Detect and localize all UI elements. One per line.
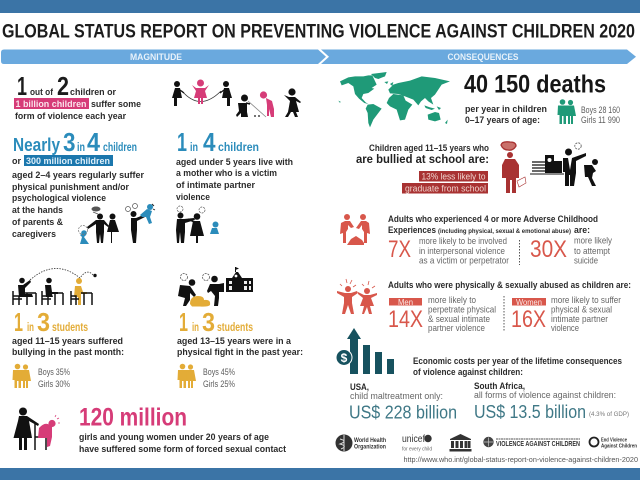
panel: nearly 3 in 4 children: 4 <box>87 127 100 157</box>
icon: economic cost chart <box>336 328 394 374</box>
panel: 1 in 3 students fighting: students <box>217 322 253 334</box>
panel: 1 out of 2 children: children or <box>70 87 116 98</box>
panel: 40 150 deaths: Girls 11 990 <box>581 115 620 125</box>
panel: economic costs: US$ 228 billion <box>349 402 457 422</box>
panel: 1 in 3 students fighting: Boys 45% <box>203 367 235 377</box>
icon: adults in violent scene <box>340 214 370 245</box>
panel: nearly 3 in 4 children <box>12 127 144 240</box>
panel: 120 million: have suffered some form of forced sexual contact <box>79 444 287 455</box>
icon: economic cost chart: $ <box>341 351 348 365</box>
panel: 120 million: girls and young women under 20 years of age <box>79 432 269 443</box>
panel: 40 150 deaths: 40 150 deaths <box>464 70 606 98</box>
icon: world map <box>338 72 450 127</box>
panel: 1 in 3 students bullying: 1 <box>14 307 23 337</box>
panel: 40 150 deaths: per year in children <box>465 104 547 115</box>
panel: 1 out of 2 children: out of <box>30 87 54 98</box>
panel: 1 out of 2 children: suffer some <box>91 99 141 110</box>
panel: 1 in 4 children: 4 <box>203 127 216 157</box>
logo: End Violence Against Children: End Violence <box>601 438 627 444</box>
icon: boy and girl (fighting) <box>178 364 196 388</box>
panel: physically and sexually abused: more likely to suffer <box>551 295 621 306</box>
panel: bullied at school: Children aged 11–15 years who <box>369 143 489 154</box>
logo: UNICEF: for every child <box>402 446 432 452</box>
panel: physically and sexually abused: perpetrate physical <box>428 304 496 316</box>
panel: economic costs <box>349 356 629 422</box>
panel: 120 million: 120 million <box>79 404 187 432</box>
panel: adverse childhood experiences: 7X <box>388 236 411 263</box>
panel: 1 in 3 students fighting: 3 <box>202 307 215 337</box>
panel: physically and sexually abused: 16X <box>511 306 546 333</box>
panel: adverse childhood experiences: in interpersonal violence <box>419 246 505 257</box>
panel: 40 150 deaths: Boys 28 160 <box>581 105 620 115</box>
panel: nearly 3 in 4 children: 3 <box>63 127 76 157</box>
panel: 1 in 3 students fighting: aged 13–15 years were in a <box>177 336 292 347</box>
panel: 1 in 4 children: of intimate partner <box>176 180 255 191</box>
panel: 1 in 3 students fighting: physical fight in the past year: <box>177 347 303 358</box>
panel: bullied at school: are bullied at school are: <box>356 152 489 166</box>
panel: physically and sexually abused: physical & sexual <box>551 304 612 316</box>
icon: parents punishing children <box>78 204 155 244</box>
panel: 1 in 4 children: in <box>190 142 198 154</box>
panel: economic costs: US$ 13.5 billion <box>474 402 586 422</box>
panel: adverse childhood experiences: are: <box>574 225 590 236</box>
section header: consequences <box>321 50 636 64</box>
panel: 1 in 3 students bullying: students <box>52 322 88 334</box>
icon: boy and girl (bullying) <box>12 364 31 388</box>
panel: economic costs: South Africa, <box>474 381 525 392</box>
panel: 1 in 3 students fighting: Girls 25% <box>203 379 235 389</box>
logo: World Health Organization <box>336 434 386 452</box>
panel: 1 in 3 students bullying: in <box>27 322 34 334</box>
panel: 1 in 3 students bullying: Girls 30% <box>38 379 70 389</box>
section header: consequences: CONSEQUENCES <box>448 52 518 62</box>
icon: distressed man and woman <box>337 279 377 314</box>
section header: magnitude: MAGNITUDE <box>130 52 182 62</box>
panel: 1 in 3 students bullying: aged 11–15 years suffered <box>12 336 123 347</box>
top banner <box>0 0 640 13</box>
logo: Office of the SRSG on Violence Against Children: VIOLENCE AGAINST CHILDREN <box>496 441 580 448</box>
panel: physically and sexually abused: Men <box>398 298 413 307</box>
panel: physically and sexually abused: & sexual intimate <box>428 314 490 325</box>
panel: adverse childhood experiences: suicide <box>574 256 598 266</box>
icon: bullied student with teacher and school <box>501 142 598 193</box>
panel: economic costs: (4.3% of GDP) <box>589 412 629 418</box>
panel: nearly 3 in 4 children: or <box>12 156 21 167</box>
logo: World Health Organization: Organization <box>354 444 386 450</box>
panel: 1 in 4 children: 1 <box>177 127 187 157</box>
panel: 1 out of 2 children: form of violence each year <box>15 111 126 122</box>
panel: adverse childhood experiences: more likely to be involved <box>419 236 507 247</box>
source url: http://www.who.int/global-status-report-on-violence-against-children-2020 <box>404 457 638 464</box>
panel: nearly 3 in 4 children: 300 million children <box>26 156 110 167</box>
logo: UNICEF: unicef <box>402 434 425 445</box>
panel: physically and sexually abused: intimate partner <box>551 314 608 325</box>
panel: economic costs: USA, <box>350 382 369 393</box>
panel: adverse childhood experiences: 30X <box>530 236 567 263</box>
icon: classroom bullying <box>13 268 97 305</box>
logo: UNESCO temple <box>450 434 472 452</box>
panel: nearly 3 in 4 children: children <box>103 142 137 154</box>
logo: End Violence Against Children <box>590 438 638 450</box>
panel: 1 out of 2 children: 2 <box>57 71 69 101</box>
panel: 1 out of 2 children: 1 billion children <box>16 99 87 110</box>
panel: 1 out of 2 children <box>14 71 141 122</box>
panel: physically and sexually abused <box>388 280 631 334</box>
logo: UNICEF <box>402 434 432 452</box>
panel: 1 in 4 children: a mother who is a victim <box>176 168 277 179</box>
panel: bullied at school: graduate from school <box>405 184 486 194</box>
panel: economic costs: all forms of violence against children: <box>474 390 616 401</box>
panel: 40 150 deaths: 0–17 years of age: <box>465 115 540 126</box>
panel: physically and sexually abused: violence <box>551 323 579 334</box>
section header: magnitude <box>1 50 326 64</box>
panel: 1 out of 2 children: 1 <box>17 71 27 101</box>
bottom banner <box>0 468 640 480</box>
panel: physically and sexually abused: partner violence <box>428 323 485 334</box>
panel: nearly 3 in 4 children: in <box>77 142 85 154</box>
icon: couple in conflict with child watching <box>176 206 219 243</box>
panel: 1 in 3 students bullying: 3 <box>37 307 50 337</box>
logo: Office of the SRSG on Violence Against Children <box>483 437 580 448</box>
panel: 1 in 4 children <box>176 127 293 203</box>
panel: economic costs: child maltreatment only: <box>350 391 443 402</box>
panel: adverse childhood experiences <box>388 214 612 266</box>
panel: 1 in 3 students bullying: bullying in the past month: <box>12 347 124 358</box>
logo: World Health Organization: World Health <box>354 437 386 444</box>
panel: physically and sexually abused: more likely to <box>428 295 476 306</box>
panel: nearly 3 in 4 children: psychological violence <box>12 193 106 204</box>
panel: 1 in 4 children: violence <box>176 192 210 203</box>
panel: nearly 3 in 4 children: Nearly <box>13 135 60 155</box>
panel: nearly 3 in 4 children: physical punishment and/or <box>12 182 129 193</box>
icon: students fighting near school <box>178 267 253 307</box>
icon: woman comforting seated girl <box>14 408 60 450</box>
icon: boy and girl (deaths) <box>558 99 576 124</box>
panel: bullied at school <box>356 143 489 194</box>
panel: nearly 3 in 4 children: of parents & <box>12 217 63 228</box>
panel: adverse childhood experiences: to attempt <box>574 246 610 257</box>
panel: adverse childhood experiences: Experiences <box>388 225 436 236</box>
panel: nearly 3 in 4 children: aged 2–4 years regularly suffer <box>12 170 144 181</box>
panel: 1 in 3 students bullying <box>12 307 124 389</box>
panel: physically and sexually abused: 14X <box>388 306 423 333</box>
panel: adverse childhood experiences: Adults who experienced 4 or more Adverse Childhood <box>388 214 598 225</box>
panel: adverse childhood experiences: (including physical, sexual & emotional abuse) <box>438 228 571 235</box>
panel: nearly 3 in 4 children: at the hands <box>12 205 63 216</box>
panel: 120 million <box>79 404 287 455</box>
panel: 1 in 3 students fighting <box>177 307 303 389</box>
panel: 1 in 3 students bullying: Boys 35% <box>38 367 70 377</box>
panel: 40 150 deaths <box>464 70 620 126</box>
panel: physically and sexually abused: Women <box>516 298 542 307</box>
panel: nearly 3 in 4 children: caregivers <box>12 229 56 240</box>
panel: economic costs: of violence against children: <box>413 367 523 378</box>
icon: children skipping rope and playing <box>172 80 301 117</box>
panel: 1 in 3 students fighting: 1 <box>179 307 188 337</box>
panel: 1 in 4 children: children <box>218 142 259 154</box>
panel: 1 in 4 children: aged under 5 years live with <box>176 157 293 168</box>
panel: bullied at school: 13% less likely to <box>422 172 486 182</box>
panel: 1 in 3 students fighting: in <box>192 322 199 334</box>
panel: adverse childhood experiences: more likely <box>574 236 612 246</box>
panel: adverse childhood experiences: as a victim or perpetrator <box>419 256 509 266</box>
